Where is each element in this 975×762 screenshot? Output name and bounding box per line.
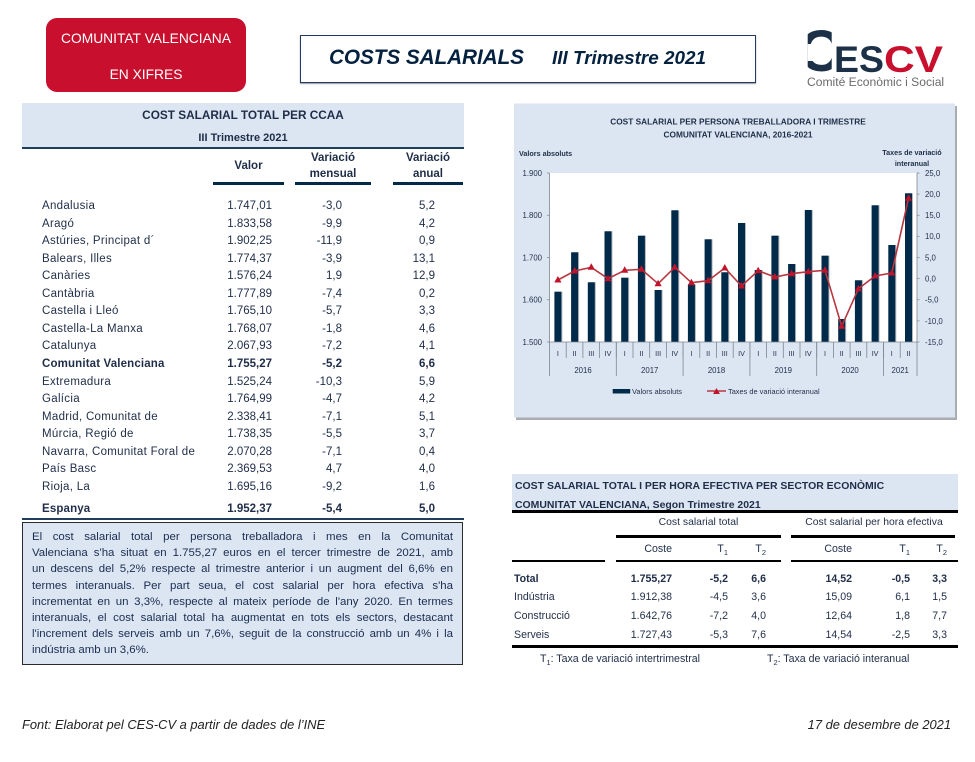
row: País Basc: 4,7 [326,463,342,475]
row: Indústria [514,590,947,602]
row: Extremadura: Extremadura [42,376,111,388]
table heading band: COST SALARIAL TOTAL I PER HORA EFECTIVA PER SECTOR ECONÒMIC [515,481,884,492]
row: Múrcia: Múrcia, Regió de [42,428,134,440]
row: Cantàbria: -7,4 [322,288,342,300]
footer: date: 17 de desembre de 2021 [808,717,951,732]
row: Andalusia [42,200,435,212]
row: Total [514,572,947,584]
row: Aragó [42,218,435,230]
row: Construcció [514,610,947,622]
row: País Basc: País Basc [42,463,96,475]
logo: CES CV: CV [884,38,943,80]
footnote: T1 and T2 [540,653,909,667]
table heading band: III Trimestre 2021 [198,132,288,144]
row: Indústria: 1,5 [932,590,947,602]
row: Catalunya: 2.067,93 [227,340,272,352]
row: Cantàbria: 0,2 [419,288,435,300]
row: Cantàbria [42,288,435,300]
row: Astúries [42,235,435,247]
quarter labels: II [906,349,910,358]
badge: Comunitat Valenciana en xifres: COMUNITAT VALENCIANA [61,31,231,46]
row: Catalunya [42,340,435,352]
row: Canàries: 1,9 [326,270,342,282]
row: Total: -5,2 [710,572,728,584]
legend [613,387,820,396]
column headers: Valor [234,160,263,172]
quarter labels: I [690,349,692,358]
right axis labels: 25,0 [925,169,941,178]
group headers: Cost salarial per hora efectiva [805,517,943,528]
row: Galícia: Galícia [42,393,80,405]
column headers [213,152,463,185]
row: Serveis: 3,3 [932,628,947,640]
column headers: T1 [717,543,728,557]
quarter labels: IV [605,349,612,358]
right axis labels: -15,0 [925,338,943,347]
footer: source: Font: Elaborat pel CES-CV a partir de dades de l’INE [22,717,325,732]
row: Galícia: 4,2 [419,393,435,405]
footnote: T1 and T2: T2: Taxa de variació interanual [767,653,909,667]
text block: summary: Valenciana s'ha situat en 1.755,27 euros en el tercer trimestre de 2021, amb [32,547,453,559]
row: Indústria: 3,6 [751,590,766,602]
right axis labels: 20,0 [925,190,941,199]
column headers: anual [413,168,443,180]
row: Astúries: 0,9 [419,235,435,247]
year labels: 2016 [574,366,592,375]
row: Comunitat Valenciana: 6,6 [419,358,435,370]
table heading band [22,103,464,149]
row: Catalunya: Catalunya [42,340,96,352]
text block: summary: l'increment dels serveis amb un 7,6%, seguit de la construcció amb un 4% i la [32,628,453,640]
badge: Comunitat Valenciana en xifres: EN XIFRES [110,67,182,82]
quarter labels: IV [872,349,879,358]
row: Castella i Lleó: Castella i Lleó [42,305,119,317]
row: Balears: 1.774,37 [227,253,272,265]
quarter labels: III [789,349,795,358]
quarter labels: IV [805,349,812,358]
row: Madrid [42,411,435,423]
column headers: Coste [824,543,852,555]
row: País Basc [42,463,435,475]
row: Andalusia: Andalusia [42,200,95,212]
quarter labels: I [557,349,559,358]
row: Castella-La Manxa: 4,6 [419,323,435,335]
year labels: 2021 [892,366,909,375]
row: Castella-La Manxa: Castella-La Manxa [42,323,143,335]
row: Total: 6,6 [751,572,766,584]
text block: summary: El cost salarial total per persona treballadora i mes en la Comunitat [32,531,453,543]
logo: CES CV: Comité Econòmic i Social [807,75,944,89]
row: Navarra: 0,4 [419,446,435,458]
row: Indústria: Indústria [514,590,555,602]
row: Aragó: 4,2 [419,218,435,230]
row: Extremadura: 1.525,24 [227,376,272,388]
row: Galícia [42,393,435,405]
row: Madrid: 5,1 [419,411,435,423]
row: Andalusia: 1.747,01 [227,200,272,212]
row: Comunitat Valenciana: 1.755,27 [227,358,272,370]
row: Castella i Lleó: -5,7 [322,305,342,317]
row: Múrcia [42,428,435,440]
row: País Basc: 2.369,53 [227,463,272,475]
year labels: 2020 [841,366,859,375]
row: País Basc: 4,0 [419,463,435,475]
row: Espanya: 1.952,37 [227,503,272,515]
row: Serveis: Serveis [514,628,549,640]
row: Galícia: -4,7 [322,393,342,405]
row: Comunitat Valenciana [42,358,435,370]
text block: summary: interanuals, el cost salarial total ha augmentat en tots els sectors, destacant [32,612,453,624]
right axis labels: 5,0 [925,254,937,262]
title box [300,35,756,83]
title box: III Trimestre 2021 [552,48,706,69]
right axis labels: -10,0 [925,317,943,326]
row: Castella i Lleó: 3,3 [419,305,435,317]
row: Construcció: 7,7 [932,610,947,622]
row: Castella i Lleó: 1.765,10 [227,305,272,317]
bars: valors absoluts [554,193,912,342]
row: Comunitat Valenciana: Comunitat Valenciana [42,358,165,370]
row: Indústria: -4,5 [710,590,728,602]
legend: Valors absoluts [632,387,682,396]
footnote: T1 and T2: T1: Taxa de variació intertrimestral [540,653,700,667]
column headers [644,543,947,557]
badge: Comunitat Valenciana en xifres [46,18,246,92]
row: Madrid: 2.338,41 [227,411,272,423]
row: Aragó: Aragó [42,218,74,230]
row: Castella-La Manxa: -1,8 [322,323,342,335]
row: Castella-La Manxa: 1.768,07 [227,323,272,335]
row: Espanya: Espanya [42,503,90,515]
row: Cantàbria: Cantàbria [42,288,95,300]
row: Serveis: 7,6 [751,628,766,640]
row: Total: Total [514,572,539,584]
row: Cantàbria: 1.777,89 [227,288,272,300]
quarter labels: II [840,349,844,358]
quarter labels: III [855,349,861,358]
chart title: COMUNITAT VALENCIANA, 2016-2021 [664,130,813,140]
row: Total: 14,52 [825,572,852,584]
table: cost salarial total per CCAA [22,103,464,520]
group headers: Cost salarial total [659,517,738,528]
right axis labels: 0,0 [925,274,937,284]
row: Total: 1.755,27 [631,572,672,584]
column headers: T1 [899,543,910,557]
chart title [610,116,866,140]
chart title: COST SALARIAL PER PERSONA TREBALLADORA I TRIMESTRE [610,116,866,126]
quarter labels: I [624,349,626,358]
row: Construcció: 1.642,76 [631,610,672,622]
row: Canàries: 12,9 [413,270,435,282]
left axis labels: 1.600 [522,296,543,304]
legend: Taxes de variació interanual [728,387,820,396]
column headers: mensual [310,168,356,180]
row: Múrcia: -5,5 [322,428,342,440]
row: Navarra: -7,1 [322,446,342,458]
table heading band: COST SALARIAL TOTAL PER CCAA [142,108,344,122]
row: Madrid: -7,1 [322,411,342,423]
row: Rioja: Rioja, La [42,481,90,493]
row: Serveis: -2,5 [892,628,910,640]
axis titles: Taxes de variació [882,148,942,157]
group headers [512,517,958,562]
chart panel: cost salarial per persona treballadora i trimestre [514,104,957,420]
column headers: T2 [936,543,947,557]
row: Total: 3,3 [932,572,947,584]
row: Castella-La Manxa [42,323,435,335]
row: Rioja [42,481,435,493]
line: taxes de variació interanual [554,194,912,329]
row: Rioja: -9,2 [322,481,342,493]
row: Balears: Balears, Illes [42,253,112,265]
row: Castella i Lleó [42,305,435,317]
year labels: 2019 [775,366,792,375]
axes and category separators [547,173,920,376]
row: Aragó: -9,9 [322,218,342,230]
row: Astúries: -11,9 [317,235,342,247]
left axis labels [522,169,543,347]
left axis labels: 1.500 [522,338,543,347]
row: Navarra: 2.070,28 [227,446,272,458]
row: Espanya: 5,0 [419,503,435,515]
row: Balears [42,253,435,265]
row: Catalunya: 4,1 [419,340,435,352]
row: Extremadura: -10,3 [316,376,342,388]
axis titles: Valors absoluts [519,149,572,158]
row: Serveis: 1.727,43 [631,628,672,640]
row: Construcció: 1,8 [895,610,910,622]
column headers: Coste [644,543,672,555]
left axis labels: 1.800 [522,211,543,220]
quarter labels: I [824,349,826,358]
left axis labels: 1.900 [522,169,543,178]
row: Construcció: -7,2 [710,610,728,622]
row: Andalusia: 5,2 [419,200,435,212]
row: Construcció: Construcció [514,610,570,622]
right axis labels: -5,0 [925,296,939,304]
row: Astúries: Astúries, Principat d´ [42,235,155,247]
row: Indústria: 1.912,38 [631,590,672,602]
quarter labels: I [891,349,893,358]
row: Andalusia: -3,0 [322,200,342,212]
quarter labels: III [588,349,594,358]
quarter labels: II [573,349,577,358]
quarter labels: I [757,349,759,358]
table heading band: COMUNITAT VALENCIANA, Segon Trimestre 2021 [515,500,761,511]
right axis labels [925,169,943,347]
quarter labels: II [639,349,643,358]
row: Balears: -3,9 [322,253,342,265]
row: Extremadura [42,376,435,388]
logo: CES CV: ES [834,38,884,80]
row: Múrcia: 1.738,35 [227,428,272,440]
text block: summary: un descens del 5,2% respecte al trimestre anterior i un augment del 6,6% en [32,563,453,575]
left axis labels: 1.700 [522,254,543,262]
row: Múrcia: 3,7 [419,428,435,440]
row: Rioja: 1.695,16 [227,481,272,493]
row: Serveis [514,628,947,640]
right axis labels: 10,0 [925,232,941,241]
quarter labels: II [706,349,710,358]
row: Astúries: 1.902,25 [227,235,272,247]
right axis labels: 15,0 [925,211,941,220]
year labels: 2017 [641,366,658,375]
logo: CES CV [807,30,944,89]
row: Indústria: 15,09 [825,590,852,602]
row: Galícia: 1.764,99 [227,393,272,405]
row: Madrid: Madrid, Comunitat de [42,411,158,423]
row: Aragó: 1.833,58 [227,218,272,230]
quarter labels: II [773,349,777,358]
row: Navarra [42,446,435,458]
row: Balears: 13,1 [413,253,435,265]
row: Catalunya: -7,2 [322,340,342,352]
text block: summary [22,522,463,665]
title box: COSTS SALARIALS [329,46,524,69]
row: Serveis: 14,54 [825,628,852,640]
column headers: T2 [755,543,766,557]
row: Canàries: 1.576,24 [227,270,272,282]
quarter labels: IV [671,349,678,358]
row: Canàries: Canàries [42,270,90,282]
row: Total: -0,5 [892,572,910,584]
row: Construcció: 12,64 [825,610,852,622]
row: Serveis: -5,3 [710,628,728,640]
row: Canàries [42,270,435,282]
text block: summary: indústria amb un 3,6%. [32,644,149,656]
year labels [574,366,909,375]
table heading band [512,474,958,513]
text block: summary: incrementat en un 3,3%, respecte al mateix període de l'any 2020. En termes [32,596,453,608]
quarter labels: IV [738,349,745,358]
row: Espanya [42,503,435,515]
row: Extremadura: 5,9 [419,376,435,388]
row: Espanya: -5,4 [322,503,342,515]
row: Rioja: 1,6 [419,481,435,493]
table: cost salarial per sector econòmic [512,474,958,667]
text block: summary: termes interanuals. Per part seua, el cost salarial per hora efectiva s'ha [32,580,453,592]
quarter labels: III [655,349,661,358]
axis titles: interanual [895,159,929,168]
axis titles [519,148,942,168]
row: Indústria: 6,1 [895,590,910,602]
column headers: Variació [311,152,355,164]
quarter labels: III [722,349,728,358]
year labels: 2018 [708,366,725,375]
column headers: Variació [406,152,450,164]
row: Construcció: 4,0 [751,610,766,622]
quarter labels [557,349,910,358]
row: Comunitat Valenciana: -5,2 [322,358,342,370]
row: Navarra: Navarra, Comunitat Foral de [42,446,195,458]
